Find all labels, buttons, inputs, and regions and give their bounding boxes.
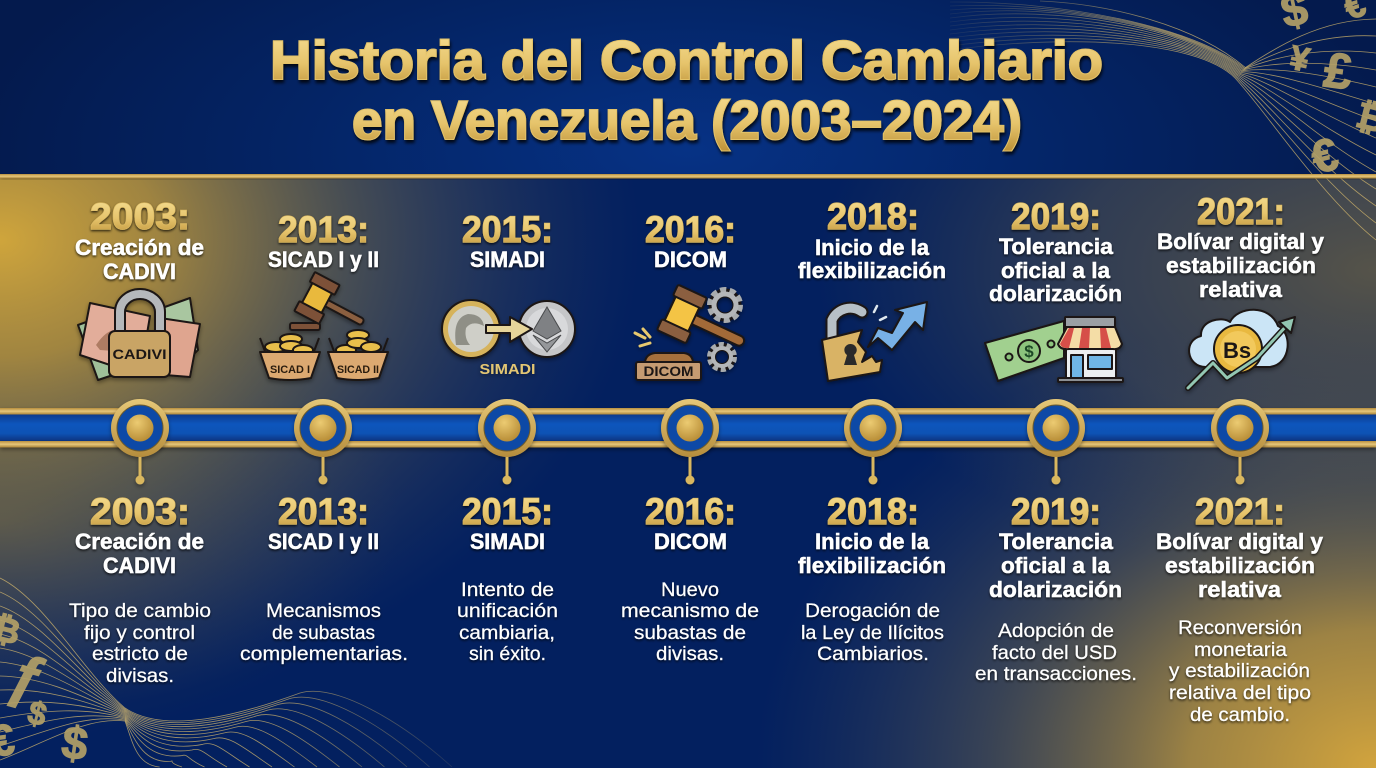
bottom column: 2021: Bolívar digital y: [1156, 529, 1324, 554]
bottom column: 2019: 2019:: [1011, 491, 1101, 532]
icon: dollar bill and shop: $: [1024, 342, 1034, 361]
bottom column: 2018: Derogación de: [805, 600, 940, 622]
top heading: 2021: estabilización: [1166, 253, 1316, 278]
bottom column: 2021: relativa del tipo: [1169, 682, 1311, 704]
top heading: 2021: [1157, 191, 1325, 302]
top heading: 2019: dolarización: [989, 281, 1122, 306]
bottom column: 2003: divisas.: [106, 665, 174, 687]
timeline node 2015: [478, 399, 536, 484]
bottom column: 2019: [975, 491, 1137, 685]
top heading: 2018: 2018:: [827, 196, 919, 237]
bottom column: 2003: fijo y control: [84, 622, 195, 644]
timeline bar: [0, 408, 1376, 448]
bottom column: 2013: Mecanismos: [266, 600, 381, 622]
icon: gavel and SICAD baskets: SICAD I: [270, 364, 310, 376]
background: header band: [0, 0, 1376, 178]
icon: DICOM gavel and gears: DICOM: [644, 363, 694, 379]
top heading: 2018: [798, 196, 946, 283]
bottom column: 2003: Creación de: [75, 529, 204, 554]
timeline node 2018: [844, 399, 902, 484]
icon: CADIVI padlock over banknotes: [78, 294, 200, 380]
bottom column: 2021: y estabilización: [1169, 660, 1310, 682]
bottom column: 2021: estabilización: [1165, 553, 1315, 578]
bottom column: 2019: Tolerancia: [999, 529, 1114, 554]
bottom column: 2019: oficial a la: [1001, 553, 1111, 578]
icon: SIMADI coin exchange: SIMADI: [480, 361, 536, 378]
currency symbols: bottom left: [0, 609, 91, 768]
icon: digital bolivar cloud: [1188, 310, 1295, 388]
bottom column: 2016: [621, 491, 759, 665]
bottom column: 2021: de cambio.: [1190, 704, 1290, 726]
icon: SIMADI coin exchange: [442, 300, 575, 378]
bottom column: 2015: SIMADI: [470, 529, 545, 554]
top heading: 2013: SICAD I y II: [268, 247, 379, 272]
top heading: 2019: 2019:: [1011, 196, 1101, 237]
bottom column: 2019: facto del USD: [992, 642, 1117, 664]
bottom column: 2003: [69, 491, 211, 687]
top heading: 2015: SIMADI: [470, 247, 545, 272]
top heading: 2019: oficial a la: [1001, 258, 1111, 283]
bottom column: 2016: mecanismo de: [621, 600, 759, 622]
background: timeline panel: [0, 178, 1376, 768]
top heading: 2003: 2003:: [90, 196, 190, 237]
timeline node 2019: [1027, 399, 1085, 484]
bottom column: 2013: complementarias.: [240, 643, 408, 665]
icon: digital bolivar cloud: Bs: [1223, 338, 1251, 363]
bottom column: 2015: cambiaria,: [459, 622, 555, 644]
bottom column: 2016: Nuevo: [661, 579, 719, 601]
bottom column: 2018: [798, 491, 946, 665]
top heading: 2003: Creación de: [75, 235, 204, 260]
top heading: 2016: [645, 209, 736, 272]
title: [270, 29, 1103, 151]
currency symbols: top right: €: [1306, 127, 1343, 184]
top heading: 2019: Tolerancia: [999, 234, 1114, 259]
top heading: 2015: 2015:: [462, 209, 553, 250]
decorative wave: bottom left: [0, 578, 452, 767]
bottom column: 2021: 2021:: [1195, 491, 1285, 532]
top heading: 2021: Bolívar digital y: [1157, 229, 1325, 254]
top heading: 2018: flexibilización: [798, 258, 946, 283]
bottom column: 2018: 2018:: [827, 491, 919, 532]
bottom column: 2021: relativa: [1198, 577, 1282, 602]
bottom column: 2003: Tipo de cambio: [69, 600, 211, 622]
top heading: 2003: [75, 196, 204, 284]
timeline node 2021: [1211, 399, 1269, 484]
bottom column: 2018: flexibilización: [798, 553, 946, 578]
title: Historia del Control Cambiario: [270, 29, 1103, 91]
top heading: 2003: CADIVI: [103, 259, 176, 284]
bottom column: 2019: dolarización: [989, 577, 1122, 602]
icon: gavel and SICAD baskets: SICAD II: [337, 364, 379, 376]
bottom column: 2016: divisas.: [656, 643, 724, 665]
bottom column: 2016: subastas de: [634, 622, 746, 644]
bottom column: 2021: Reconversión: [1178, 617, 1302, 639]
bottom column: 2019: Adopción de: [998, 620, 1114, 642]
bottom column: 2003: 2003:: [90, 491, 190, 532]
bottom column: 2013: SICAD I y II: [268, 529, 379, 554]
bottom column: 2018: Inicio de la: [815, 529, 930, 554]
icon: dollar bill and shop: [985, 317, 1123, 382]
bottom column: 2015: sin éxito.: [469, 643, 546, 665]
timeline node 2003: [111, 399, 169, 484]
bottom column: 2021: [1156, 491, 1324, 726]
top heading: 2013: 2013:: [278, 209, 369, 250]
bottom column: 2015: 2015:: [462, 491, 553, 532]
bottom column: 2015: unificación: [457, 600, 558, 622]
bottom column: 2013: 2013:: [278, 491, 369, 532]
bottom column: 2013: [240, 491, 408, 665]
icon: broken padlock with rising arrow: [822, 302, 927, 381]
timeline node 2016: [661, 399, 719, 484]
top heading: 2021: 2021:: [1197, 191, 1285, 232]
icon: gavel and SICAD baskets: [260, 272, 388, 380]
bottom column: 2015: [457, 491, 558, 665]
bottom column: 2018: la Ley de Ilícitos: [801, 622, 944, 644]
currency symbols: bottom left: ƒ: [2, 640, 53, 714]
bottom column: 2013: de subastas: [272, 622, 375, 644]
title: en Venezuela (2003–2024): [352, 89, 1022, 151]
bottom column: 2016: 2016:: [645, 491, 736, 532]
icon: CADIVI padlock over banknotes: CADIVI: [112, 346, 166, 362]
bottom column: 2018: Cambiarios.: [817, 643, 929, 665]
top heading: 2021: relativa: [1199, 277, 1283, 302]
currency symbols: top right: ¥: [1286, 39, 1313, 80]
currency symbols: top right: [1276, 0, 1376, 184]
top heading: 2019: [989, 196, 1122, 306]
top heading: 2018: Inicio de la: [815, 235, 930, 260]
decorative wave: top right: [950, 1, 1376, 240]
timeline node 2013: [294, 399, 352, 484]
bottom column: 2003: estricto de: [92, 643, 188, 665]
top heading: 2015: [462, 209, 553, 272]
bottom column: 2021: monetaria: [1194, 639, 1287, 661]
header divider line: [0, 174, 1376, 178]
top heading: 2016: DICOM: [654, 247, 727, 272]
top heading: 2013: [268, 209, 379, 272]
bottom column: 2016: DICOM: [654, 529, 727, 554]
bottom column: 2015: Intento de: [461, 579, 554, 601]
bottom column: 2003: CADIVI: [103, 553, 176, 578]
bottom column: 2019: en transacciones.: [975, 663, 1137, 685]
icon: DICOM gavel and gears: [635, 285, 754, 380]
top heading: 2016: 2016:: [645, 209, 736, 250]
currency symbols: top right: £: [1320, 41, 1356, 101]
currency symbols: bottom left: $: [24, 694, 50, 733]
